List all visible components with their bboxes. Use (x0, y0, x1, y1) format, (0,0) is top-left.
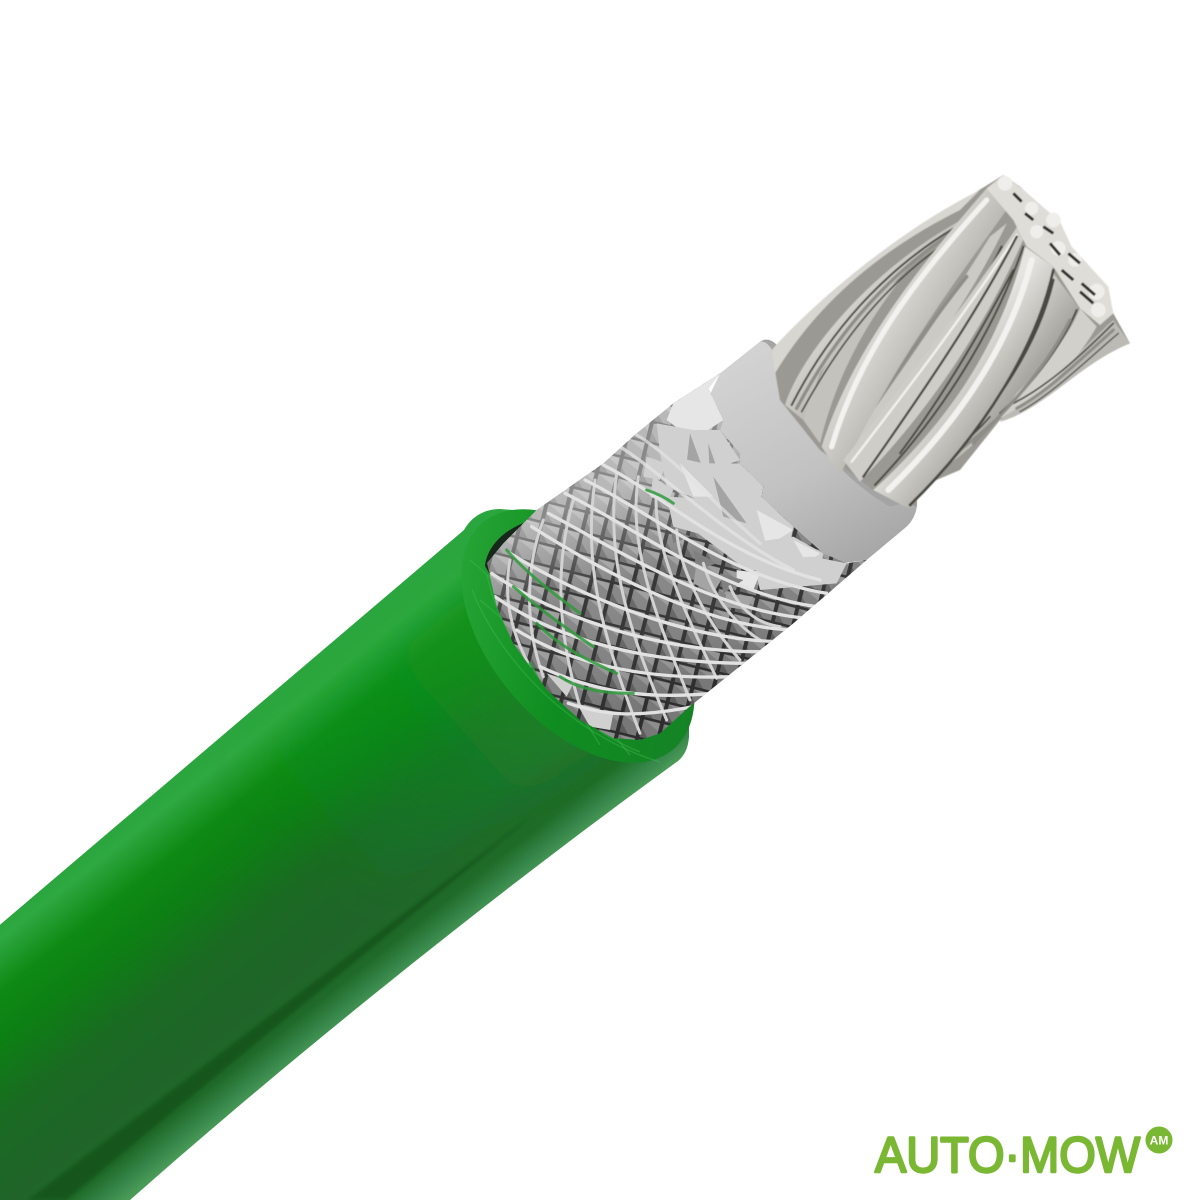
wire core silhouette (772, 175, 1130, 507)
crossing braid wires (492, 435, 827, 733)
foil facets near the band (547, 373, 847, 730)
logo badge: AM (1150, 1134, 1168, 1148)
braid body (487, 374, 866, 740)
back wire strands (772, 190, 1130, 485)
band inner lip (760, 340, 917, 507)
metal braid shield and inner insulation (460, 340, 917, 747)
wire groove shadows (792, 227, 1118, 478)
cut wire ends (987, 175, 1113, 325)
logo badge (1146, 1126, 1172, 1154)
green cable jacket (0, 509, 694, 1200)
white insulation band (693, 341, 917, 570)
jacket dark reflection line (28, 815, 533, 1200)
front wire strands (822, 188, 1053, 508)
twisted steel wire core (772, 175, 1130, 508)
jacket end ring (415, 466, 741, 806)
ring reflections (470, 560, 660, 762)
logo: AUTO·MOW: AUTO·MOW (875, 1127, 1141, 1183)
cable opening shadow (485, 520, 570, 610)
